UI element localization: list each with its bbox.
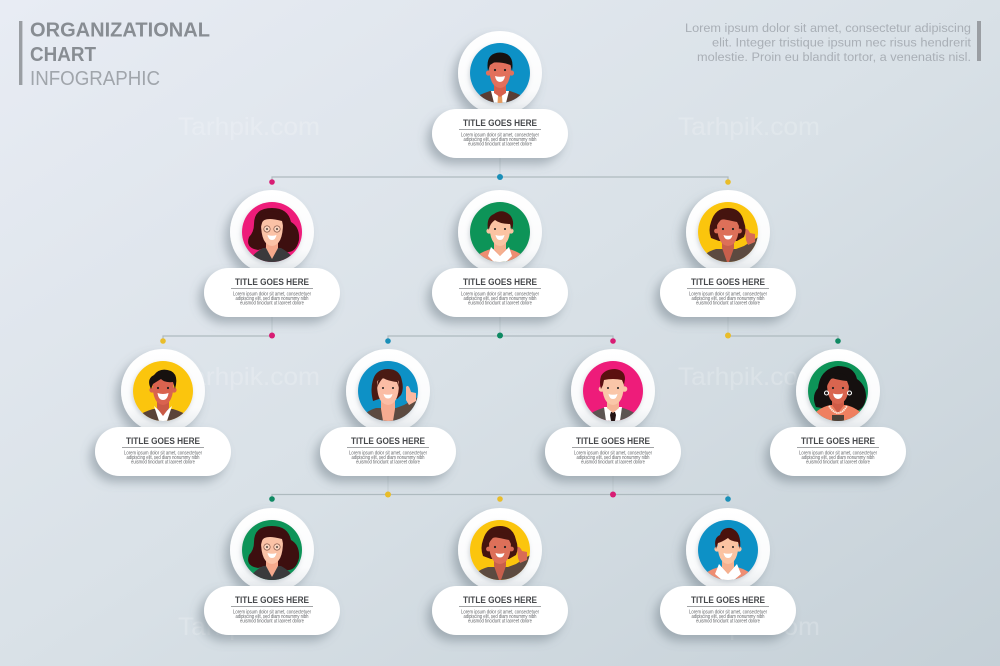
- avatar: woman thumbs-up on yellow: [470, 520, 530, 580]
- node: top executive: [432, 31, 568, 158]
- info card: TITLE GOES HERE: [691, 277, 765, 287]
- node: level 4 left: [204, 508, 340, 635]
- info card: adipiscing elit, sed diam nonummy nibh: [576, 455, 650, 461]
- info card: euismod tincidunt ut laoreet dolore: [240, 301, 304, 307]
- info card: adipiscing elit, sed diam nonummy nibh: [236, 296, 309, 302]
- watermark text: Tarhpik.com: [678, 613, 820, 641]
- description block: molestie. Proin eu blandit tortor, a venenatis nisl.: [697, 50, 971, 64]
- node: level 3 second: [320, 349, 456, 476]
- info card: adipiscing elit, sed diam nonummy nibh: [692, 614, 765, 620]
- info card: euismod tincidunt ut laoreet dolore: [696, 619, 760, 625]
- title block: ORGANIZATIONAL: [30, 20, 210, 42]
- info card: Lorem ipsum dolor sit amet, consectetuer: [799, 450, 877, 456]
- info card: [320, 427, 456, 476]
- avatar: man with tie on pink: [583, 361, 643, 421]
- info card: [432, 268, 568, 317]
- info card: TITLE GOES HERE: [463, 118, 537, 128]
- watermark text: Tarhpik.com: [678, 363, 820, 391]
- info card: Lorem ipsum dolor sit amet, consectetuer: [689, 609, 767, 615]
- info card: adipiscing elit, sed diam nonummy nibh: [464, 296, 537, 302]
- info card: euismod tincidunt ut laoreet dolore: [468, 301, 532, 307]
- title block: INFOGRAPHIC: [30, 68, 160, 90]
- info card: TITLE GOES HERE: [235, 595, 309, 605]
- info card: [432, 109, 568, 158]
- avatar: woman with glasses on pink: [242, 202, 302, 262]
- avatar: woman with necklace on green: [808, 361, 868, 422]
- info card: TITLE GOES HERE: [801, 436, 875, 446]
- connector: level 3 to level 4: [269, 476, 731, 502]
- description block: [685, 21, 981, 64]
- info card: adipiscing elit, sed diam nonummy nibh: [236, 614, 309, 620]
- avatar: person on blue: [698, 520, 758, 580]
- node: level 2 centre: [432, 190, 568, 317]
- info card: Lorem ipsum dolor sit amet, consectetuer: [461, 609, 539, 615]
- info card: Lorem ipsum dolor sit amet, consectetuer: [461, 132, 539, 138]
- info card: [770, 427, 906, 476]
- avatar: man on green: [470, 202, 530, 262]
- info card: euismod tincidunt ut laoreet dolore: [468, 619, 532, 625]
- description block: elit. Integer tristique ipsum nec risus hendrerit: [712, 36, 972, 50]
- info card: [432, 586, 568, 635]
- avatar: woman thumbs-up on yellow: [698, 202, 758, 262]
- info card: TITLE GOES HERE: [463, 595, 537, 605]
- info card: adipiscing elit, sed diam nonummy nibh: [464, 137, 537, 143]
- info card: [545, 427, 681, 476]
- avatar: man on yellow: [133, 361, 193, 421]
- title block: CHART: [30, 44, 96, 66]
- info card: euismod tincidunt ut laoreet dolore: [581, 460, 645, 466]
- title block: [19, 20, 210, 90]
- avatar: woman with glasses on green: [242, 520, 302, 580]
- info card: Lorem ipsum dolor sit amet, consectetuer: [574, 450, 652, 456]
- info card: euismod tincidunt ut laoreet dolore: [356, 460, 420, 466]
- info card: euismod tincidunt ut laoreet dolore: [468, 142, 532, 148]
- watermark text: [178, 113, 820, 641]
- info card: [204, 586, 340, 635]
- connector: level 2 to level 3: [160, 317, 841, 344]
- node: level 3 first: [95, 349, 231, 476]
- info card: adipiscing elit, sed diam nonummy nibh: [692, 296, 765, 302]
- node: level 4 right: [660, 508, 796, 635]
- node: level 2 left: [204, 190, 340, 317]
- info card: TITLE GOES HERE: [351, 436, 425, 446]
- info card: TITLE GOES HERE: [235, 277, 309, 287]
- info card: TITLE GOES HERE: [576, 436, 650, 446]
- avatar: woman thumbs-up on blue: [358, 361, 418, 421]
- info card: euismod tincidunt ut laoreet dolore: [240, 619, 304, 625]
- description block: Lorem ipsum dolor sit amet, consectetur adipiscing: [685, 21, 971, 35]
- info card: [204, 268, 340, 317]
- info card: Lorem ipsum dolor sit amet, consectetuer: [689, 291, 767, 297]
- info card: adipiscing elit, sed diam nonummy nibh: [802, 455, 875, 461]
- info card: Lorem ipsum dolor sit amet, consectetuer: [349, 450, 427, 456]
- info card: [660, 586, 796, 635]
- info card: Lorem ipsum dolor sit amet, consectetuer: [461, 291, 539, 297]
- watermark text: Tarhpik.com: [178, 363, 320, 391]
- info card: adipiscing elit, sed diam nonummy nibh: [126, 455, 200, 461]
- info card: [660, 268, 796, 317]
- info card: Lorem ipsum dolor sit amet, consectetuer: [233, 609, 311, 615]
- connector: level 1 to level 2: [269, 158, 731, 185]
- info card: TITLE GOES HERE: [126, 436, 200, 446]
- node: level 3 fourth: [770, 349, 906, 476]
- avatar: man on blue: [470, 43, 530, 103]
- watermark text: Tarhpik.com: [178, 113, 320, 141]
- watermark text: Tarhpik.com: [178, 613, 320, 641]
- node: level 2 right: [660, 190, 796, 317]
- info card: Lorem ipsum dolor sit amet, consectetuer: [124, 450, 202, 456]
- node: level 3 third: [545, 349, 681, 476]
- info card: euismod tincidunt ut laoreet dolore: [696, 301, 760, 307]
- watermark text: Tarhpik.com: [678, 113, 820, 141]
- info card: adipiscing elit, sed diam nonummy nibh: [464, 614, 537, 620]
- info card: Lorem ipsum dolor sit amet, consectetuer: [233, 291, 311, 297]
- info card: TITLE GOES HERE: [691, 595, 765, 605]
- node: level 4 centre: [432, 508, 568, 635]
- info card: [95, 427, 231, 476]
- info card: euismod tincidunt ut laoreet dolore: [131, 460, 195, 466]
- info card: adipiscing elit, sed diam nonummy nibh: [352, 455, 425, 461]
- info card: TITLE GOES HERE: [463, 277, 537, 287]
- info card: euismod tincidunt ut laoreet dolore: [806, 460, 870, 466]
